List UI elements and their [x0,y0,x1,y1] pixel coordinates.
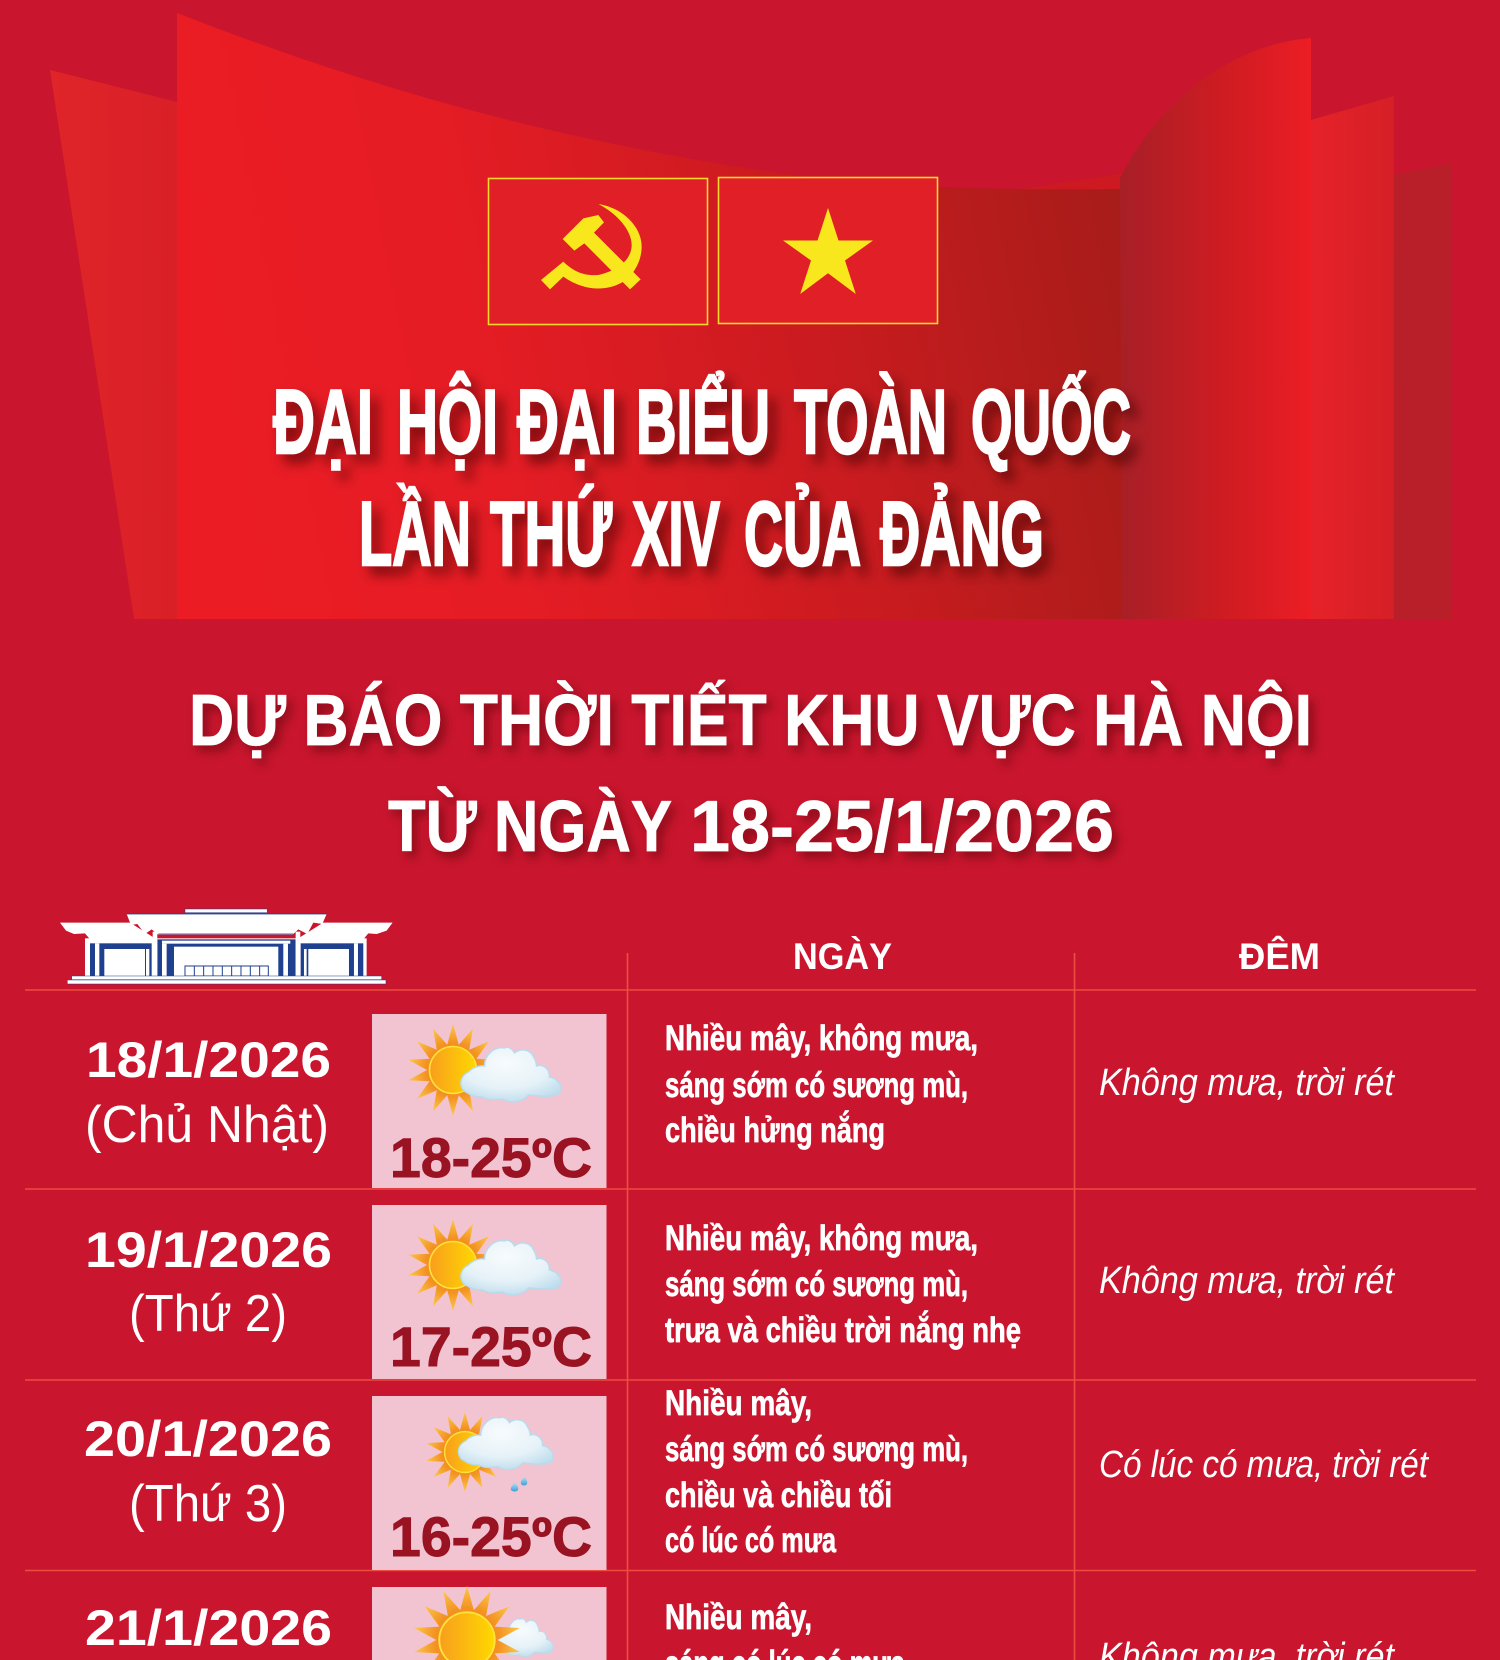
daytime forecast: Nhiều mây, [665,1598,812,1637]
row: 20/1/2026 [84,1384,1429,1570]
daytime forecast: Nhiều mây, không mưa, [665,1019,978,1058]
title: ĐẠI [517,372,617,473]
weather card [372,1587,606,1660]
flag panel: far right [1394,163,1452,619]
icon: sun and cloud [408,1024,561,1116]
title: ĐẢNG [880,483,1044,585]
daytime forecast: sáng sớm có sương mù, [665,1265,968,1304]
title: CỦA [744,483,861,585]
daytime forecast: trưa và chiều trời nắng nhẹ [665,1310,1021,1350]
row: 19/1/2026 [85,1205,1395,1379]
title: BIỂU [636,371,770,473]
daytime forecast: sáng sớm có sương mù, [665,1430,968,1469]
column header: night: ĐÊM [1239,935,1320,977]
flag panel: main waving cloth [177,13,1122,619]
date: 20/1/2026 [84,1411,332,1467]
daytime forecast [665,1019,978,1150]
heading: forecast [189,680,1312,867]
daytime forecast: Nhiều mây, [665,1384,812,1423]
table grid lines [25,953,1476,1660]
daytime forecast: có lúc có mưa [665,1521,836,1560]
row: 18/1/2026 [85,1014,1395,1189]
date: 21/1/2026 [85,1600,332,1656]
flag panel: right [1311,96,1394,619]
weather card [372,1205,606,1379]
daytime forecast [665,1219,1021,1350]
daytime forecast: Nhiều mây, không mưa, [665,1219,978,1258]
daytime forecast [665,1384,968,1560]
title: ĐẠI [273,372,373,473]
weather card [372,1396,606,1570]
date: 19/1/2026 [85,1222,332,1278]
heading: forecast: DỰ BÁO THỜI TIẾT KHU VỰC HÀ NỘI [189,680,1312,761]
date: 18/1/2026 [86,1032,331,1088]
title: TOÀN [794,372,947,473]
flag panel: wedge behind fold [1014,173,1124,190]
row: 21/1/2026 [85,1586,1395,1660]
title: QUỐC [971,371,1131,473]
daytime forecast: chiều và chiều tối [665,1476,892,1515]
icon: sun and small cloud [414,1586,553,1660]
heading: forecast: 18-25/1/2026 [690,787,1114,867]
weekday: (Chủ Nhật) [85,1096,329,1154]
national flag with star [718,178,938,324]
daytime forecast [665,1598,905,1660]
title: THỨ [490,484,612,585]
temperature: 16-25ºC [390,1505,592,1568]
icon: sun, cloud and rain [426,1412,553,1492]
icon: National Convention Centre building [60,909,393,984]
banner: red flag backdrop [50,13,1452,619]
night forecast: Không mưa, trời rét [1099,1260,1395,1302]
icon: sun and cloud [408,1219,561,1311]
title: HỘI [397,371,498,473]
icon: yellow star [783,208,873,294]
column header: day: NGÀY [793,936,892,977]
night forecast: Có lúc có mưa, trời rét [1099,1444,1429,1486]
night forecast: Không mưa, trời rét [1099,1062,1395,1104]
title: XIV [632,484,720,585]
daytime forecast: chiều hửng nắng [665,1110,885,1150]
weekday: (Thứ 2) [129,1285,287,1343]
icon: hammer and sickle [541,204,642,289]
weekday: (Thứ 3) [129,1475,287,1533]
weather card [372,1014,606,1188]
heading: forecast: TỪ NGÀY [388,786,672,867]
flag panel: curled fold [1120,38,1311,619]
daytime forecast: sáng sớm có sương mù, [665,1066,968,1105]
temperature: 18-25ºC [390,1126,592,1189]
flag panel: far left [50,70,177,619]
temperature: 17-25ºC [390,1315,592,1378]
title: LẦN [359,483,471,585]
title [273,371,1131,585]
party flag with hammer and sickle [488,178,708,324]
